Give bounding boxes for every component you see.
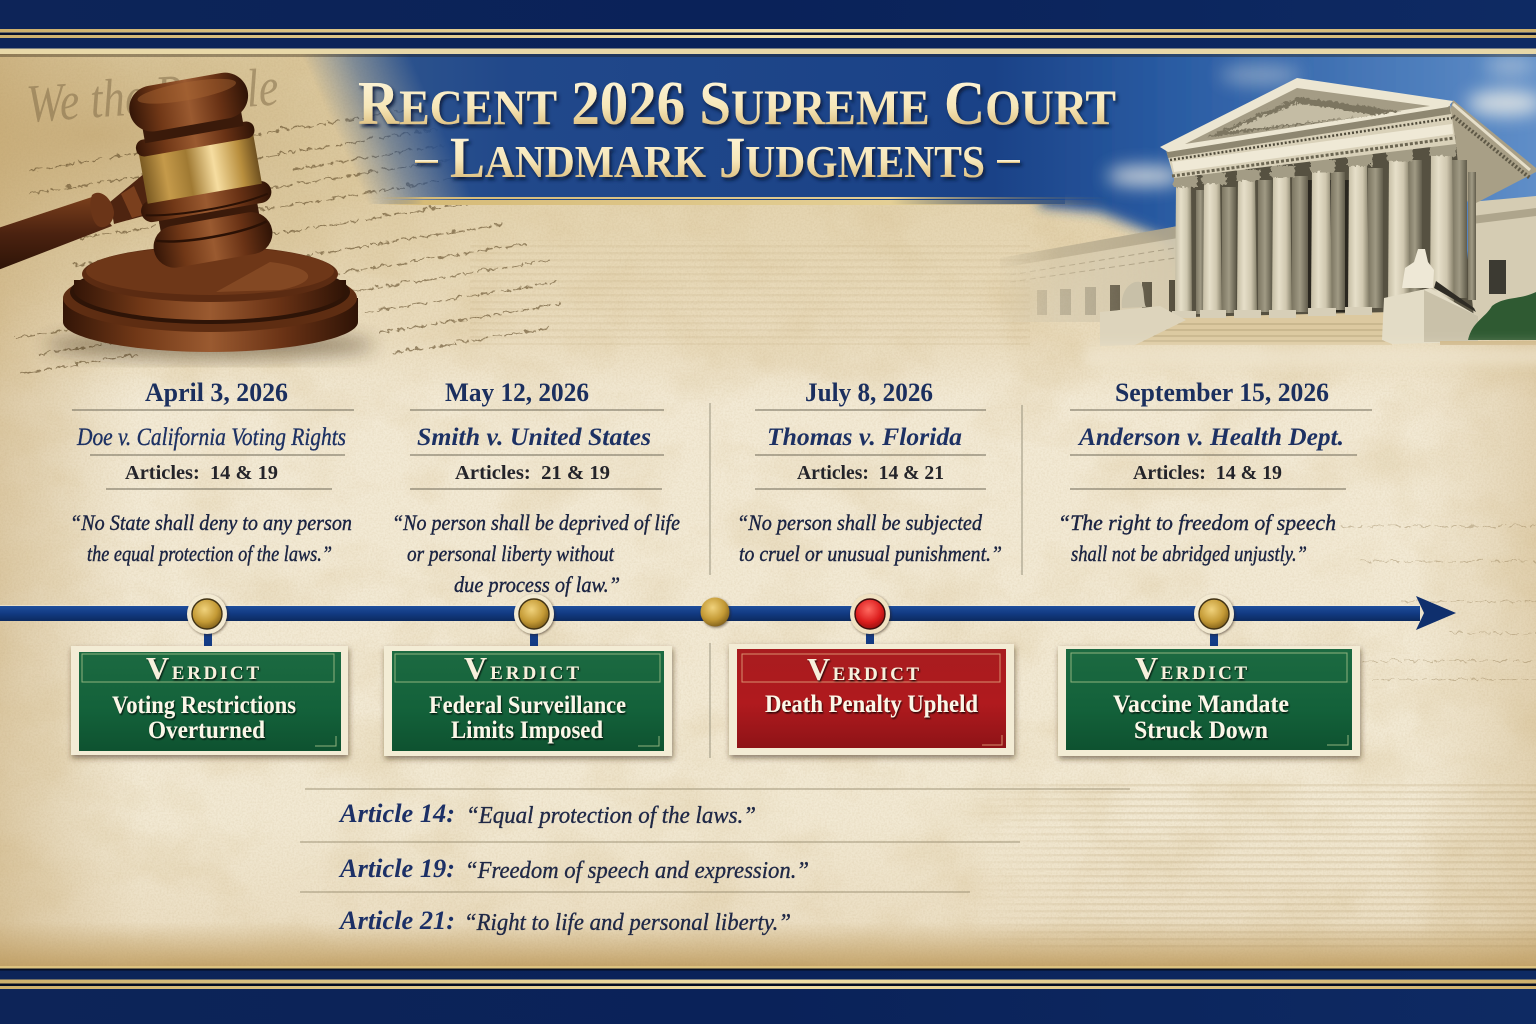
judgment 3: July 8, 2026 — [737, 378, 1002, 566]
steps — [1110, 312, 1392, 345]
article reference list — [300, 789, 1130, 936]
date: September 15, 2026 — [1115, 378, 1329, 407]
verdict label: VERDICT — [464, 650, 579, 686]
handle — [0, 172, 158, 270]
fade to parchment beneath building — [1085, 340, 1536, 370]
We the People heading script: We the People — [25, 57, 280, 134]
verdict text: Voting Restrictions — [112, 692, 296, 719]
verdict text: Limits Imposed — [451, 717, 603, 744]
verdict card 2 — [384, 646, 672, 756]
article 14: “Equal protection of the laws.” — [466, 803, 756, 829]
article 21: Article 21: — [338, 906, 455, 935]
timeline column dividers — [710, 403, 1022, 758]
left pedestal and statue — [1100, 306, 1186, 346]
verdict label: VERDICT — [146, 650, 259, 686]
timeline connectors — [204, 628, 1218, 648]
right wing — [1470, 196, 1536, 332]
portico dark interior — [1178, 135, 1474, 322]
clouds in the sky — [1107, 58, 1536, 186]
verdict card 3 — [729, 644, 1014, 755]
verdict label: VERDICT — [807, 651, 919, 687]
back columns — [1196, 160, 1476, 314]
verdict text: Federal Surveillance — [429, 692, 626, 719]
verdict text: Death Penalty Upheld — [765, 691, 978, 718]
roof side — [1440, 100, 1536, 206]
bottom border band — [0, 966, 1536, 1024]
quote: “No person shall be deprived of life — [392, 510, 680, 535]
sound block — [63, 246, 358, 352]
quote — [70, 510, 352, 566]
case name: Smith v. United States — [417, 424, 651, 451]
articles: Articles: 21 & 19 — [455, 462, 610, 484]
quote: “No State shall deny to any person — [70, 510, 352, 535]
quote — [392, 510, 680, 597]
quote: due process of law.” — [454, 572, 620, 597]
article 21 — [338, 906, 791, 936]
date: May 12, 2026 — [445, 378, 589, 407]
verdict text — [112, 692, 296, 744]
illustration: gavel and sound block — [0, 68, 375, 359]
case name: Thomas v. Florida — [767, 424, 962, 451]
verdict text — [429, 692, 626, 744]
verdict card 1 — [71, 646, 348, 755]
front columns — [1175, 152, 1454, 313]
case name: Anderson v. Health Dept. — [1077, 424, 1344, 451]
article 19: Article 19: — [338, 854, 455, 883]
article 19: “Freedom of speech and expression.” — [465, 858, 809, 884]
gavel shadow — [45, 331, 375, 359]
case name: Doe v. California Voting Rights — [76, 424, 346, 451]
verdict text: Vaccine Mandate — [1113, 691, 1289, 718]
plaza ledge — [1440, 341, 1536, 345]
quote: or personal liberty without — [407, 541, 615, 566]
date: April 3, 2026 — [145, 378, 288, 407]
quote — [1058, 510, 1336, 566]
title — [358, 70, 1116, 190]
judgment 1: April 3, 2026 — [70, 378, 354, 566]
articles: Articles: 14 & 19 — [125, 462, 278, 484]
judgment 2: May 12, 2026 — [392, 378, 680, 597]
gavel head — [120, 68, 282, 272]
quote: to cruel or unusual punishment.” — [739, 541, 1002, 566]
timeline arrow — [0, 596, 1456, 630]
title: RECENT 2026 SUPREME COURT — [358, 70, 1116, 138]
handwritten script, right margin — [1340, 525, 1536, 678]
column capitals — [1172, 142, 1455, 186]
timeline nodes — [187, 594, 1234, 634]
verdict text: Overturned — [148, 717, 265, 744]
article 14 — [338, 799, 756, 829]
left wing — [1000, 226, 1178, 322]
article 14: Article 14: — [338, 799, 455, 828]
quote: “The right to freedom of speech — [1058, 510, 1336, 535]
illustration: Supreme Court building — [1000, 78, 1536, 370]
pediment — [1160, 78, 1453, 152]
top border band — [0, 0, 1536, 57]
title banner and sky — [306, 54, 1536, 260]
judgment 4: September 15, 2026 — [1058, 378, 1372, 566]
date: July 8, 2026 — [805, 378, 933, 407]
verdict label: VERDICT — [1135, 650, 1247, 686]
quote: shall not be abridged unjustly.” — [1071, 541, 1307, 566]
column bases — [1172, 305, 1395, 318]
title: LANDMARK JUDGMENTS — [450, 125, 985, 190]
quote: the equal protection of the laws.” — [87, 541, 332, 566]
articles: Articles: 14 & 21 — [797, 462, 944, 484]
quote — [737, 510, 1002, 566]
article 19 — [338, 854, 809, 884]
verdict card 4 — [1058, 646, 1360, 756]
articles: Articles: 14 & 19 — [1133, 462, 1282, 484]
tree — [1468, 292, 1536, 340]
handwritten constitution script, upper left — [0, 90, 564, 409]
right pedestal and statue — [1382, 249, 1478, 344]
article 21: “Right to life and personal liberty.” — [464, 910, 791, 936]
title dashes — [415, 160, 1020, 163]
verdict text: Struck Down — [1134, 717, 1268, 744]
verdict text — [1113, 691, 1289, 744]
entablature — [1166, 104, 1456, 178]
quote: “No person shall be subjected — [737, 510, 983, 535]
title gold rule — [380, 197, 1110, 205]
